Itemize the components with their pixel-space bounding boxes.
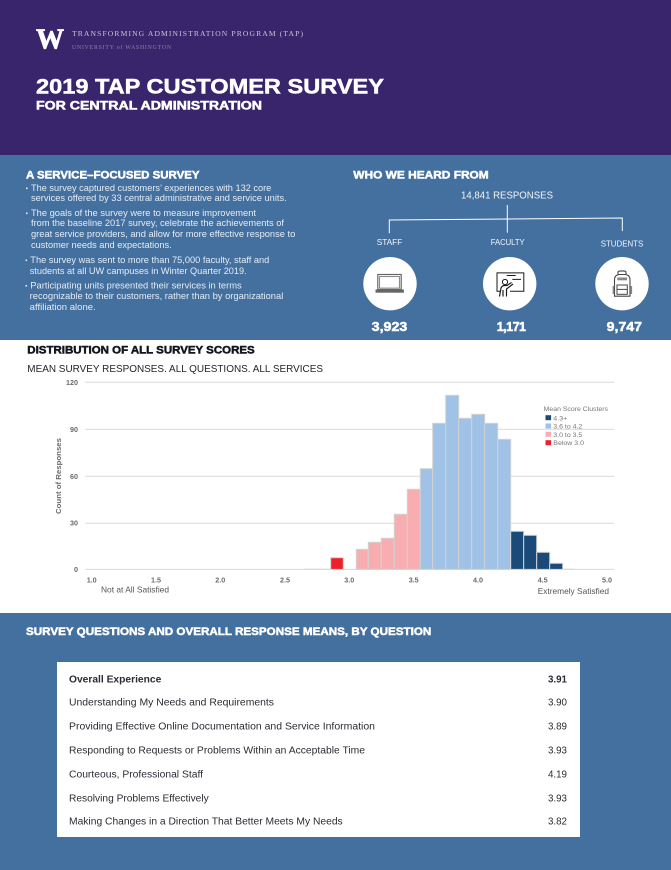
panel: header (0, 0, 671, 155)
row: understanding needs: 3.90 (548, 697, 567, 708)
legend: Mean Score Clusters (544, 406, 609, 413)
text block: survey description bullets: from the baseline 2017 survey, celebrate the achievements of (31, 218, 284, 228)
university name: UNIVERSITY of WASHINGTON (72, 44, 172, 51)
row: making changes: Making Changes in a Direction That Better Meets My Needs (69, 816, 343, 827)
title: 2019 TAP CUSTOMER SURVEY (36, 74, 384, 98)
y axis labels: 60 (70, 472, 78, 481)
text block: survey description bullets: students at all UW campuses in Winter Quarter 2019. (30, 266, 247, 276)
row: online documentation: 3.89 (548, 721, 567, 732)
legend (544, 406, 609, 447)
subtitle: FOR CENTRAL ADMINISTRATION (36, 98, 262, 112)
text block: survey description bullets: The goals of the survey were to measure improvement (31, 208, 256, 218)
text block: survey description bullets: customer needs and expectations. (31, 240, 172, 250)
icon: university W logo: W (36, 25, 64, 56)
total responses: 14,841 RESPONSES (461, 190, 553, 201)
heading: survey questions and means: SURVEY QUESTIONS AND OVERALL RESPONSE MEANS, BY QUESTION (26, 626, 431, 638)
bars: 4.3 and above (511, 531, 563, 569)
y axis labels: 0 (74, 565, 78, 574)
y axis labels: 120 (66, 378, 78, 387)
heading: who we heard from: WHO WE HEARD FROM (353, 169, 489, 181)
x axis labels (87, 576, 612, 585)
x axis labels: 1.0 (87, 576, 97, 585)
text block: survey description bullets (26, 183, 295, 312)
bars: below 3.0 (331, 558, 343, 569)
row: responding to requests: 3.93 (548, 745, 567, 756)
connector lines from total to groups (389, 205, 622, 233)
x axis labels: 2.5 (280, 576, 290, 585)
number: staff responses: 3,923 (372, 320, 407, 334)
text block: survey description bullets: recognizable to their customers, rather than by organizational (30, 291, 283, 301)
y axis labels: 90 (70, 425, 78, 434)
row: responding to requests: Responding to Requests or Problems Within an Acceptable Time (69, 745, 366, 756)
panel: survey overview and respondents (0, 155, 671, 340)
y axis labels: 30 (70, 518, 78, 528)
icon: laptop (363, 257, 417, 310)
legend: 4.3+ (553, 415, 567, 422)
heading: a service-focused survey: A SERVICE–FOCUSED SURVEY (26, 170, 200, 182)
x axis labels: 5.0 (602, 576, 612, 585)
text block: survey description bullets: affiliation alone. (30, 302, 96, 312)
row: making changes: 3.82 (548, 816, 567, 827)
legend: 3.0 to 3.5 (553, 432, 583, 439)
table: question means (57, 662, 580, 837)
bars: 3.6 to 4.2 (420, 395, 511, 569)
icon: teacher at board (483, 257, 536, 310)
legend: 3.6 to 4.2 (553, 424, 583, 431)
row: online documentation (69, 721, 567, 732)
histogram bars (304, 395, 575, 570)
x axis labels: 3.0 (344, 576, 354, 585)
heading: distribution of all survey scores: DISTRIBUTION OF ALL SURVEY SCORES (27, 345, 255, 357)
x axis labels: 4.5 (538, 576, 548, 585)
row: resolving problems: Resolving Problems Effectively (69, 793, 209, 804)
row: courteous staff (69, 769, 567, 780)
text block: survey description bullets: Participating units presented their services in terms (30, 281, 242, 291)
row: courteous staff: Courteous, Professional Staff (69, 769, 203, 780)
bars: 3.0 to 3.5 (356, 489, 420, 569)
row: responding to requests (69, 745, 567, 756)
legend: Below 3.0 (553, 440, 584, 447)
label: students: STUDENTS (601, 238, 644, 248)
panel: distribution chart (0, 340, 671, 613)
text block: survey description bullets: The survey was sent to more than 75,000 faculty, staff and (30, 255, 269, 265)
x axis labels: 1.5 (151, 576, 161, 585)
x axis labels: 4.0 (473, 576, 483, 585)
row: overall experience: 3.91 (548, 674, 567, 685)
axis note: not at all satisfied: Not at All Satisfied (101, 585, 169, 595)
row: online documentation: Providing Effective Online Documentation and Service Information (69, 721, 375, 732)
text block: survey description bullets: services offered by 33 central administrative and service units. (31, 193, 287, 203)
x axis labels: 2.0 (215, 576, 225, 585)
label: staff: STAFF (377, 237, 402, 247)
x axis labels: 3.5 (409, 576, 419, 585)
program name: TRANSFORMING ADMINISTRATION PROGRAM (TAP) (72, 29, 303, 38)
number: student responses: 9,747 (607, 320, 642, 334)
y axis labels (66, 378, 78, 574)
row: courteous staff: 4.19 (548, 769, 567, 780)
icon: backpack (595, 257, 649, 310)
text block: survey description bullets: great service providers, and allow for more effective response to (31, 229, 295, 239)
row: understanding needs (69, 697, 567, 708)
axis note: extremely satisfied: Extremely Satisfied (538, 586, 609, 596)
number: faculty responses: 1,171 (497, 320, 526, 334)
text block: survey description bullets: The survey captured customers’ experiences with 132 core (31, 183, 271, 193)
label: faculty: FACULTY (491, 237, 525, 247)
row: understanding needs: Understanding My Needs and Requirements (69, 697, 274, 708)
row: overall experience (69, 674, 567, 685)
row: making changes (69, 816, 567, 827)
y axis title: Count of Responses (54, 438, 63, 514)
row: overall experience: Overall Experience (69, 674, 162, 685)
subheading: mean survey responses: MEAN SURVEY RESPONSES. ALL QUESTIONS. ALL SERVICES (27, 363, 323, 375)
panel: survey questions (0, 613, 671, 870)
row: resolving problems: 3.93 (548, 793, 567, 804)
row: resolving problems (69, 793, 567, 804)
